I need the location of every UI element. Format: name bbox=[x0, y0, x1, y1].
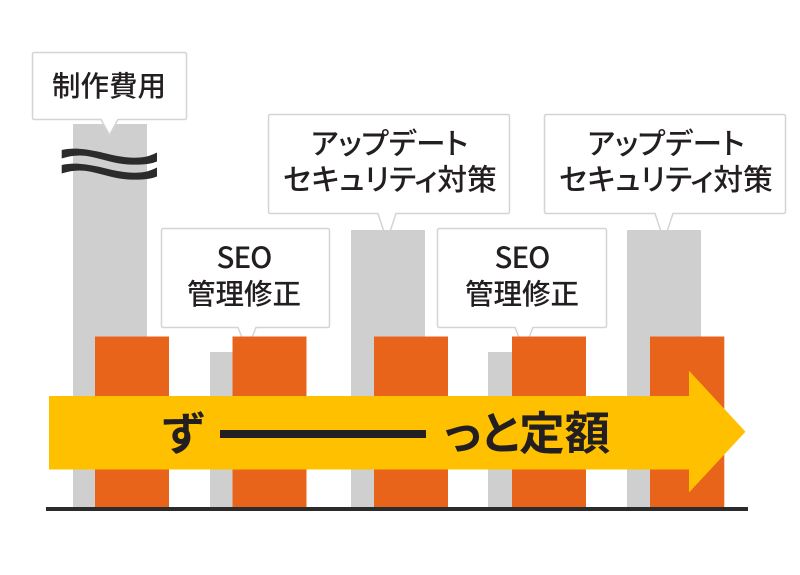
callout: update and security 2: アップデート bbox=[587, 121, 745, 163]
arrow: continuous flat fee: っと定額 bbox=[444, 398, 610, 464]
arrow: continuous flat fee bbox=[49, 371, 746, 492]
callout: SEO management 1: 管理修正 bbox=[187, 272, 301, 313]
callout: production cost: 制作費用 bbox=[52, 64, 166, 105]
callout: update and security 2: セキュリティ対策 bbox=[559, 155, 773, 199]
callout: update and security 2 bbox=[544, 114, 786, 241]
icon: axis break mark bbox=[62, 149, 157, 180]
callout: update and security 1: セキュリティ対策 bbox=[283, 155, 497, 199]
callout: production cost bbox=[32, 52, 186, 135]
callout: SEO management 1: SEO bbox=[217, 235, 271, 277]
callout: SEO management 2 bbox=[438, 228, 606, 350]
gray bars: individual costs bbox=[73, 124, 701, 509]
arrow label: ず bbox=[162, 398, 205, 462]
callout: update and security 1: アップデート bbox=[311, 121, 468, 163]
orange bars: flat-rate fee bbox=[95, 336, 724, 508]
callout: SEO management 2: 管理修正 bbox=[465, 272, 579, 313]
baseline axis bbox=[46, 507, 748, 511]
callout: SEO management 2: SEO bbox=[495, 235, 549, 277]
callout: SEO management 1 bbox=[162, 228, 330, 350]
callout: update and security 1 bbox=[268, 114, 510, 241]
